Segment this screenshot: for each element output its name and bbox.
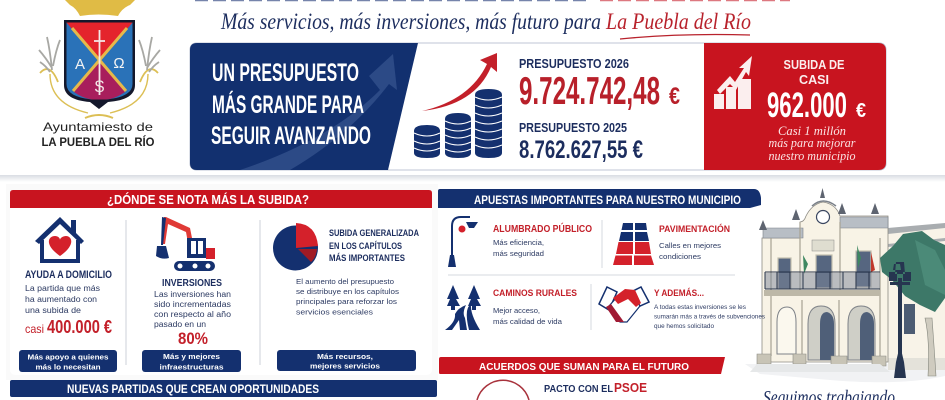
heading: APUESTAS IMPORTANTES PARA NUESTRO MUNICIPIO (474, 195, 741, 207)
column: inversiones (142, 217, 241, 372)
logo: Ayuntamiento coat of arms (39, 0, 160, 149)
item: alumbrado publico: Más eficiencia, (493, 240, 544, 247)
column: inversiones: con respecto al año (154, 310, 232, 319)
heading: acuerdos (439, 357, 725, 374)
budget figures: € (669, 83, 680, 110)
column: inversiones: 80% (178, 329, 208, 348)
column: subida generalizada: principales para reforzar los (296, 297, 397, 306)
item: alumbrado publico (448, 217, 592, 267)
pillars bases (757, 354, 886, 366)
windows (778, 251, 871, 289)
heading: nuevas partidas (10, 380, 437, 397)
heading (438, 189, 761, 208)
column: ayuda a domicilio (19, 217, 117, 372)
budget figures: 8.762.627,55 € (519, 136, 643, 164)
item: y ademas: A todas estas inversiones se les (654, 305, 746, 311)
budget figures: PRESUPUESTO 2026 (519, 56, 629, 71)
item: caminos rurales: CAMINOS RURALES (493, 288, 577, 299)
tree (880, 231, 945, 376)
chart: pie (273, 223, 318, 270)
column: inversiones: Las inversiones han (154, 290, 231, 299)
text: pacto con el PSOE: PSOE (614, 380, 647, 395)
item: y ademas: que hemos solicitado (654, 324, 715, 330)
button (19, 350, 117, 372)
illustration: town hall (745, 188, 945, 382)
arches (777, 306, 875, 360)
icon: excavator (156, 217, 215, 271)
column: ayuda a domicilio: AYUDA A DOMICILIO (25, 269, 112, 281)
steps (750, 364, 890, 372)
subtitle: Más servicios, más inversiones, más futuro para (220, 9, 601, 34)
panel: red increase box: 962.000 (767, 86, 847, 125)
item: pavimentacion: PAVIMENTACIÓN (659, 223, 730, 235)
button: más lo necesitan (36, 362, 101, 372)
budget figures: PRESUPUESTO 2025 (519, 120, 627, 135)
panel: blue headline: UN PRESUPUESTO (212, 59, 359, 87)
panel: blue headline: MÁS GRANDE PARA (212, 90, 364, 119)
balcony (764, 272, 880, 296)
button: Más recursos, (317, 352, 373, 361)
icon: growth chart (714, 56, 752, 109)
text: pacto con el PSOE (544, 380, 647, 395)
column: inversiones: INVERSIONES (162, 277, 222, 289)
icon: trees and road (445, 285, 481, 330)
icon: shield: Ω (113, 55, 125, 72)
column: subida generalizada (273, 223, 419, 371)
panel: red increase box (704, 43, 886, 170)
icon: street lamp (448, 217, 478, 267)
button: Más apoyo a quienes (28, 352, 108, 362)
button: Más y mejores (163, 352, 220, 361)
panel: red increase box: CASI (799, 72, 829, 87)
facade (762, 202, 888, 362)
panel: red increase box: € (856, 100, 866, 122)
column: ayuda a domicilio: La partida que más (25, 284, 100, 293)
panel: blue headline: SEGUIR AVANZANDO (211, 122, 371, 150)
column: ayuda a domicilio: casi (25, 322, 44, 336)
ground (745, 364, 945, 382)
item: y ademas: Y ADEMÁS... (654, 288, 704, 299)
parapets and finials (759, 188, 888, 356)
column: subida generalizada: se distribuye en los capítulos (296, 287, 399, 296)
heading: nuevas partidas: NUEVAS PARTIDAS QUE CREAN OPORTUNIDADES (67, 384, 319, 396)
item: y ademas: sumarán más a través de subvenciones (654, 314, 765, 320)
budget figures (519, 56, 680, 164)
item: pavimentacion (613, 223, 730, 265)
icon: pact seal (477, 380, 529, 400)
column: ayuda a domicilio: ha aumentado con (25, 295, 97, 304)
icon: shield: $ (95, 77, 105, 96)
budget figures: 9.724.742,48 (519, 70, 660, 113)
button: infraestructuras (160, 362, 224, 372)
text: pacto con el PSOE: PACTO CON EL (544, 383, 614, 395)
column: subida generalizada: EN LOS CAPÍTULOS (329, 241, 402, 252)
panel: apuestas importantes (438, 189, 765, 330)
icon: shield: A (75, 56, 85, 73)
icon: shield (64, 20, 135, 109)
subtitle (220, 9, 751, 39)
column: subida generalizada: SUBIDA GENERALIZADA (329, 228, 419, 239)
icon: coin stacks and rising arrow (414, 53, 502, 158)
item: alumbrado publico: ALUMBRADO PÚBLICO (493, 222, 592, 235)
text: La Puebla del Río: LA PUEBLA DEL RÍO (42, 136, 155, 149)
panel: blue headline (190, 43, 418, 170)
item: pavimentacion: Calles en mejores (659, 241, 721, 250)
column: subida generalizada: MÁS IMPORTANTES (329, 253, 405, 264)
flags (803, 245, 861, 274)
button: mejores servicios (310, 362, 380, 370)
panel: budget banner (190, 43, 886, 170)
panel: red increase box: SUBIDA DE (784, 57, 845, 72)
panel: donde se nota mas la subida (10, 190, 432, 375)
panel: red increase box: nuestro municipio (768, 148, 856, 163)
heading: ¿DÓNDE SE NOTA MÁS LA SUBIDA? (107, 192, 309, 207)
column: ayuda a domicilio: 400.000 € (47, 317, 112, 337)
panel: red increase box: Casi 1 millón (778, 123, 846, 138)
button (277, 350, 416, 371)
side wing (888, 225, 945, 362)
clock (816, 210, 830, 224)
panel: red increase box: más para mejorar (768, 135, 856, 150)
icon: handshake (599, 287, 649, 322)
icon: crown (65, 0, 135, 16)
heading (10, 190, 432, 208)
column: subida generalizada: El aumento del presupuesto (296, 277, 394, 286)
heading: acuerdos: ACUERDOS QUE SUMAN PARA EL FUTURO (479, 361, 689, 373)
column: inversiones: sido incrementadas (154, 300, 231, 309)
icon: house with heart (35, 217, 84, 263)
column: inversiones: pasado en un (154, 320, 206, 329)
street lamp (889, 262, 911, 378)
item: y ademas (599, 287, 765, 330)
item: caminos rurales: más calidad de vida (493, 317, 563, 326)
subtitle: La Puebla del Río (605, 9, 751, 34)
item: pavimentacion: condiciones (659, 252, 701, 261)
column: subida generalizada: servicios esenciales (296, 308, 373, 316)
icon: paving (613, 223, 654, 265)
item: alumbrado publico: más seguridad (493, 251, 544, 258)
item: caminos rurales (445, 285, 577, 330)
text: Ayuntamiesto de: Ayuntamiesto de (43, 120, 153, 134)
button (142, 350, 241, 372)
column: ayuda a domicilio: una subida de (25, 306, 82, 315)
item: caminos rurales: Mejor acceso, (493, 306, 540, 315)
icon: laurel branches (39, 37, 160, 118)
